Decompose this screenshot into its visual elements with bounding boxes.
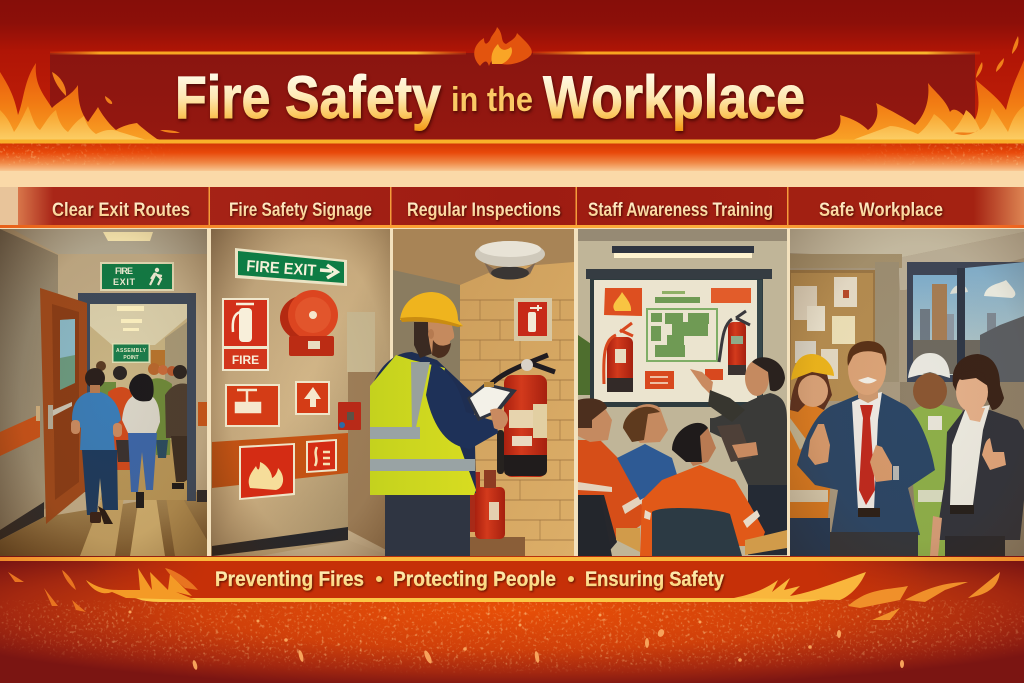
- right extinguisher: [719, 311, 750, 375]
- floor: [0, 490, 207, 556]
- clipboard: [467, 382, 517, 421]
- plant: [578, 335, 600, 395]
- sign: extinguisher and fire: FIRE: [232, 353, 259, 367]
- seated trainee: front: [640, 423, 765, 556]
- light fixture: [612, 246, 754, 258]
- footer text: ensuring safety: Ensuring Safety: [585, 568, 724, 591]
- footer bullet: [568, 576, 574, 582]
- sign: assembly point: POINT: [123, 355, 139, 361]
- sign: assembly point: ASSEMBLY: [116, 348, 147, 354]
- panel frame backing: [0, 228, 1024, 558]
- label: fire safety signage: Fire Safety Signage: [229, 200, 372, 221]
- sign: fire exit: FIRE: [115, 266, 133, 276]
- footer text: preventing fires: Preventing Fires: [215, 568, 364, 591]
- flames: right: [810, 36, 1024, 143]
- icon: top flame: [474, 27, 532, 66]
- footer top gold line: [0, 557, 1024, 561]
- footer background: [0, 556, 1024, 683]
- seated trainee: left: [578, 398, 648, 556]
- high-vis vest: [370, 355, 476, 495]
- seated trainee: middle: [617, 404, 678, 500]
- large sparks: [128, 610, 904, 670]
- baseboard: [0, 502, 44, 540]
- corridor through doorway: [90, 304, 207, 500]
- panel: safe workplace: [789, 229, 1024, 556]
- sign: fire exit: EXIT: [113, 277, 136, 287]
- person: woman in white shirt: [122, 374, 160, 508]
- panel: clear exit routes: [0, 229, 207, 556]
- clipboard tablet: [717, 424, 752, 462]
- sign: assembly point: [112, 343, 150, 363]
- title: Workplace: Workplace: [543, 64, 805, 131]
- flames: banner left: [8, 568, 198, 612]
- footer bullet: [376, 576, 382, 582]
- sign: smoke: [306, 439, 337, 473]
- sign: fire exit: [100, 262, 174, 291]
- small floor extinguisher: [470, 470, 525, 556]
- brick corner wall: [347, 312, 385, 554]
- left wall: [0, 229, 58, 540]
- title: [175, 64, 805, 131]
- sign: hydrant valve: [225, 384, 280, 427]
- evacuation plan board: [586, 269, 772, 407]
- header band: [0, 0, 1024, 172]
- left extinguisher: [604, 323, 633, 392]
- top ornament line: [50, 52, 980, 54]
- icon: smoke detector: [475, 241, 545, 280]
- window with city view: [907, 262, 1024, 382]
- bottom gold line of plaque: [0, 140, 1024, 144]
- person: man in blue shirt: [71, 368, 122, 524]
- icon: manual call point: [338, 402, 361, 430]
- label: regular inspections: Regular Inspections: [407, 200, 561, 221]
- manager: man in navy suit: [797, 341, 935, 556]
- head and beard: [414, 322, 432, 358]
- sign: flame: [239, 443, 295, 500]
- person: man in brown coat: [165, 365, 187, 489]
- label: safe workplace: Safe Workplace: [819, 200, 943, 221]
- icon: fire alarm bell: [280, 290, 338, 356]
- door: [36, 288, 87, 524]
- thumbs up: [808, 424, 830, 465]
- bottom red note: [645, 371, 674, 389]
- sign: fire exit arrow: FIRE EXIT: [246, 258, 317, 280]
- baseboard and floor: [212, 527, 348, 556]
- sign: extinguisher and fire: [222, 298, 269, 371]
- chairs: [578, 495, 742, 556]
- sign: extinguisher wall sign: [514, 298, 552, 341]
- title: Fire Safety: Fire Safety: [175, 64, 442, 131]
- divider strips: [207, 228, 790, 557]
- title plaque: [50, 53, 975, 141]
- panel: fire safety signage: [211, 229, 390, 556]
- corkboard: [789, 270, 875, 401]
- sign: up arrow: [295, 381, 330, 415]
- people in corridor: [96, 361, 177, 470]
- flames: banner right: [734, 572, 1000, 620]
- flames: left: [0, 63, 180, 143]
- wall and ceiling: [393, 229, 574, 556]
- trainer pointing: [690, 357, 787, 555]
- footer text: protecting people: Protecting People: [393, 568, 556, 591]
- flame panel: [604, 288, 642, 316]
- ceiling: [790, 229, 1024, 290]
- ceiling: [12, 229, 207, 254]
- label: clear exit routes: Clear Exit Routes: [52, 200, 190, 221]
- cream separator band: [0, 171, 1024, 188]
- panel: staff awareness training: [578, 229, 787, 556]
- large extinguisher: [490, 355, 555, 477]
- worker: yellow hat woman: [790, 354, 835, 556]
- orange wall stripe: [0, 414, 40, 456]
- table: [616, 528, 640, 552]
- sign: fire exit arrow: [235, 248, 347, 286]
- hard hat: [400, 292, 463, 326]
- header bars: [662, 291, 685, 294]
- door frame: [78, 293, 196, 501]
- footer banner: [8, 561, 1000, 620]
- title: in the: in the: [451, 81, 533, 119]
- label: staff awareness training: Staff Awareness Training: [588, 200, 773, 221]
- sleeve: [426, 362, 498, 449]
- section label strip: [0, 187, 1024, 229]
- manager: woman in blazer: [930, 354, 1024, 556]
- panel: regular inspections: [370, 229, 574, 556]
- worker: white hat man: [908, 353, 962, 556]
- floor plan: [647, 309, 717, 361]
- inspector in high-vis vest: [370, 292, 517, 556]
- orange wall band: [212, 433, 348, 488]
